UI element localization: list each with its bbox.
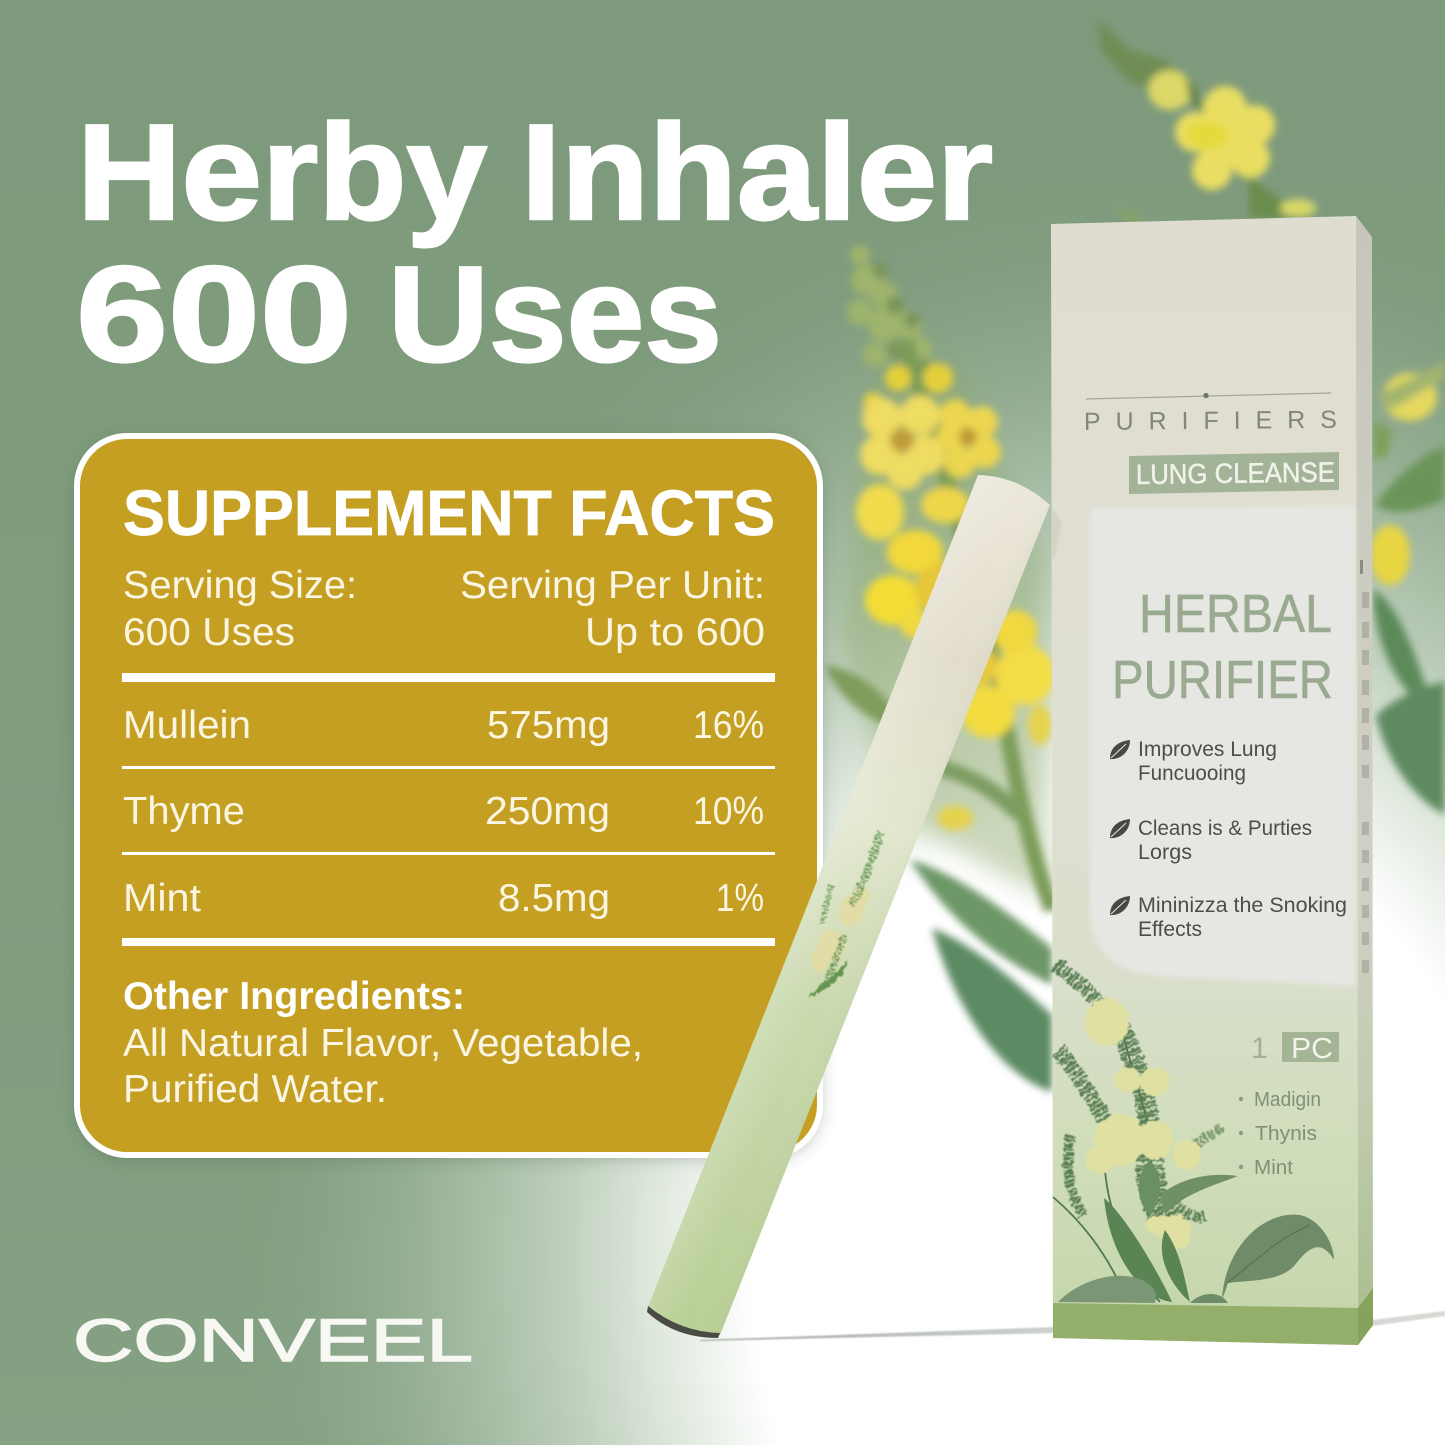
other ingredients: All Natural Flavor, Vegetable, — [123, 1022, 643, 1065]
box front face — [1051, 216, 1358, 1345]
row: thyme: 250mg — [485, 790, 610, 833]
box title: HERBAL — [1139, 584, 1332, 644]
title: Uses — [388, 238, 722, 390]
side panel small print — [1360, 560, 1369, 973]
box quantity: 1 PC — [1251, 1032, 1339, 1065]
benefit 3: Effects — [1138, 918, 1202, 941]
floor shadows — [700, 1311, 1445, 1341]
title: Herby — [77, 96, 487, 248]
row: mullein: 16% — [693, 704, 764, 747]
row: thyme: 10% — [693, 790, 764, 833]
box ingredient list — [1239, 1089, 1321, 1179]
icon: leaf — [1110, 740, 1130, 759]
icon: leaf — [1110, 819, 1130, 838]
thin stems — [1053, 1025, 1160, 1302]
row: mullein — [123, 704, 764, 747]
heading: SUPPLEMENT FACTS — [123, 477, 775, 549]
box title — [1112, 584, 1333, 710]
panel background — [77, 436, 820, 1155]
row: mullein: Mullein — [123, 704, 251, 747]
title: 600 — [76, 238, 352, 390]
pen shadow on box — [1052, 508, 1062, 560]
brand logo: CONVEEL — [73, 1307, 473, 1374]
box light label area — [1090, 506, 1355, 986]
title — [76, 96, 993, 390]
benefit 3: Mininizza the Snoking — [1138, 894, 1347, 917]
box green base band — [1053, 1288, 1373, 1345]
rule and dot — [1086, 393, 1331, 399]
other ingredients: Other Ingredients: — [123, 975, 465, 1018]
panel: supplement facts — [77, 436, 820, 1155]
product box — [1051, 216, 1373, 1345]
blurred mullein plant, upper stalk — [1097, 18, 1316, 222]
row: mint — [123, 877, 764, 920]
row: mint: 1% — [716, 877, 764, 920]
box botanical illustration — [1053, 965, 1334, 1303]
serving information: Serving Per Unit: — [460, 564, 765, 607]
row: mullein: 575mg — [487, 704, 610, 747]
box ingredient list: Mint — [1254, 1157, 1293, 1179]
blurred mullein plant, main stalk — [825, 245, 1055, 1092]
pen body — [648, 475, 1050, 1335]
row: mint: 8.5mg — [498, 877, 610, 920]
row: mint: Mint — [123, 877, 201, 920]
box ingredient list: Madigin — [1254, 1089, 1321, 1111]
benefit 2 — [1110, 817, 1312, 864]
other ingredients: Purified Water. — [123, 1068, 387, 1111]
large leaf — [1190, 1215, 1334, 1303]
green leaves — [1104, 1160, 1238, 1302]
benefit 3 — [1110, 894, 1347, 941]
pen shading — [648, 475, 1050, 1335]
box benefit list — [1110, 738, 1347, 941]
box brand line: PURIFIERS — [1084, 406, 1337, 436]
fern fronds — [1056, 965, 1222, 1222]
benefit 1: Funcuooing — [1138, 762, 1246, 785]
row: thyme: Thyme — [123, 790, 245, 833]
pale yellow flower clusters — [1085, 998, 1202, 1250]
box quantity: 1 PC: PC — [1291, 1033, 1333, 1065]
pen dark tip — [647, 1306, 720, 1338]
benefit 2: Cleans is & Purties — [1138, 817, 1312, 840]
icon: leaf — [1110, 896, 1130, 915]
foliage haze — [840, 340, 1050, 900]
row: thyme — [123, 790, 764, 833]
serving information: Serving Size: — [123, 564, 357, 607]
box ingredient list: Thynis — [1255, 1123, 1317, 1145]
pen botanical print — [808, 832, 881, 998]
title: Inhaler — [521, 96, 993, 248]
serving information: Up to 600 — [585, 611, 765, 654]
inhaler pen — [647, 475, 1062, 1338]
box top and right side — [1356, 216, 1373, 1345]
serving information — [123, 564, 765, 654]
blurred mullein plant, right side — [1370, 362, 1445, 815]
benefit 1: Improves Lung — [1138, 738, 1277, 761]
other ingredients — [123, 975, 643, 1111]
benefit 1 — [1110, 738, 1277, 785]
benefit 2: Lorgs — [1138, 841, 1192, 864]
low leaf — [1058, 1276, 1156, 1303]
box quantity: 1 PC: 1 — [1251, 1032, 1268, 1065]
box title: PURIFIER — [1112, 650, 1333, 710]
serving information: 600 Uses — [123, 611, 295, 654]
box badge: lung cleanse: LUNG CLEANSE — [1136, 457, 1335, 490]
